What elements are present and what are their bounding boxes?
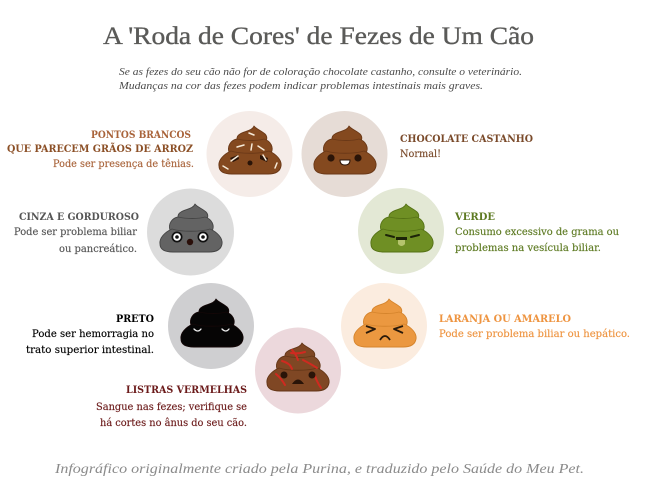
label: green: VERDE bbox=[454, 212, 495, 223]
subtitle text: Mudanças na cor das fezes podem indicar problemas intestinais mais graves. bbox=[118, 80, 483, 92]
label: chocolate: CHOCOLATE CASTANHO bbox=[400, 134, 533, 145]
label: gray: Pode ser problema biliar bbox=[14, 227, 137, 238]
label: black: PRETO bbox=[116, 314, 154, 325]
label: red streaks: Sangue nas fezes; verifique se bbox=[96, 402, 247, 413]
panel: white specks poop bbox=[206, 111, 292, 197]
label: gray bbox=[14, 212, 139, 255]
label: white specks: Pode ser presença de tênias. bbox=[53, 159, 194, 170]
label: white specks: PONTOS BRANCOS bbox=[91, 130, 191, 141]
label: black: Pode ser hemorragia no bbox=[32, 329, 154, 340]
label: green: Consumo excessivo de grama ou bbox=[455, 227, 620, 238]
label: chocolate: Normal! bbox=[400, 149, 441, 160]
label: white specks: QUE PARECEM GRÃOS DE ARROZ bbox=[7, 143, 193, 155]
panel: chocolate poop bbox=[302, 111, 388, 197]
subtitle text bbox=[118, 66, 522, 92]
label: green bbox=[454, 212, 620, 254]
panel: gray poop bbox=[147, 188, 234, 276]
panel: green poop bbox=[358, 188, 444, 274]
label: green: problemas na vesícula biliar. bbox=[455, 243, 601, 254]
panel: black poop bbox=[168, 283, 254, 369]
label: black: trato superior intestinal. bbox=[26, 345, 154, 356]
label: red streaks: LISTRAS VERMELHAS bbox=[126, 385, 247, 396]
panel: orange poop bbox=[341, 283, 427, 369]
footer credit: Infográfico originalmente criado pela Purina, e traduzido pelo Saúde do Meu Pet. bbox=[54, 462, 584, 477]
title: A 'Roda de Cores' de Fezes de Um Cão bbox=[103, 23, 534, 50]
label: orange: LARANJA OU AMARELO bbox=[439, 314, 571, 325]
label: gray: CINZA E GORDUROSO bbox=[19, 212, 139, 223]
label: red streaks bbox=[96, 385, 247, 429]
label: orange: Pode ser problema biliar ou hepático. bbox=[439, 329, 630, 340]
label: chocolate bbox=[400, 134, 533, 160]
subtitle text: Se as fezes do seu cão não for de coloração chocolate castanho, consulte o veterinário. bbox=[119, 66, 522, 78]
panel: red streak poop bbox=[255, 328, 341, 414]
label: red streaks: há cortes no ânus do seu cão. bbox=[100, 418, 247, 429]
label: gray: ou pancreático. bbox=[59, 244, 137, 255]
label: orange bbox=[439, 314, 630, 340]
label: white specks bbox=[7, 130, 194, 170]
label: black bbox=[26, 314, 154, 356]
